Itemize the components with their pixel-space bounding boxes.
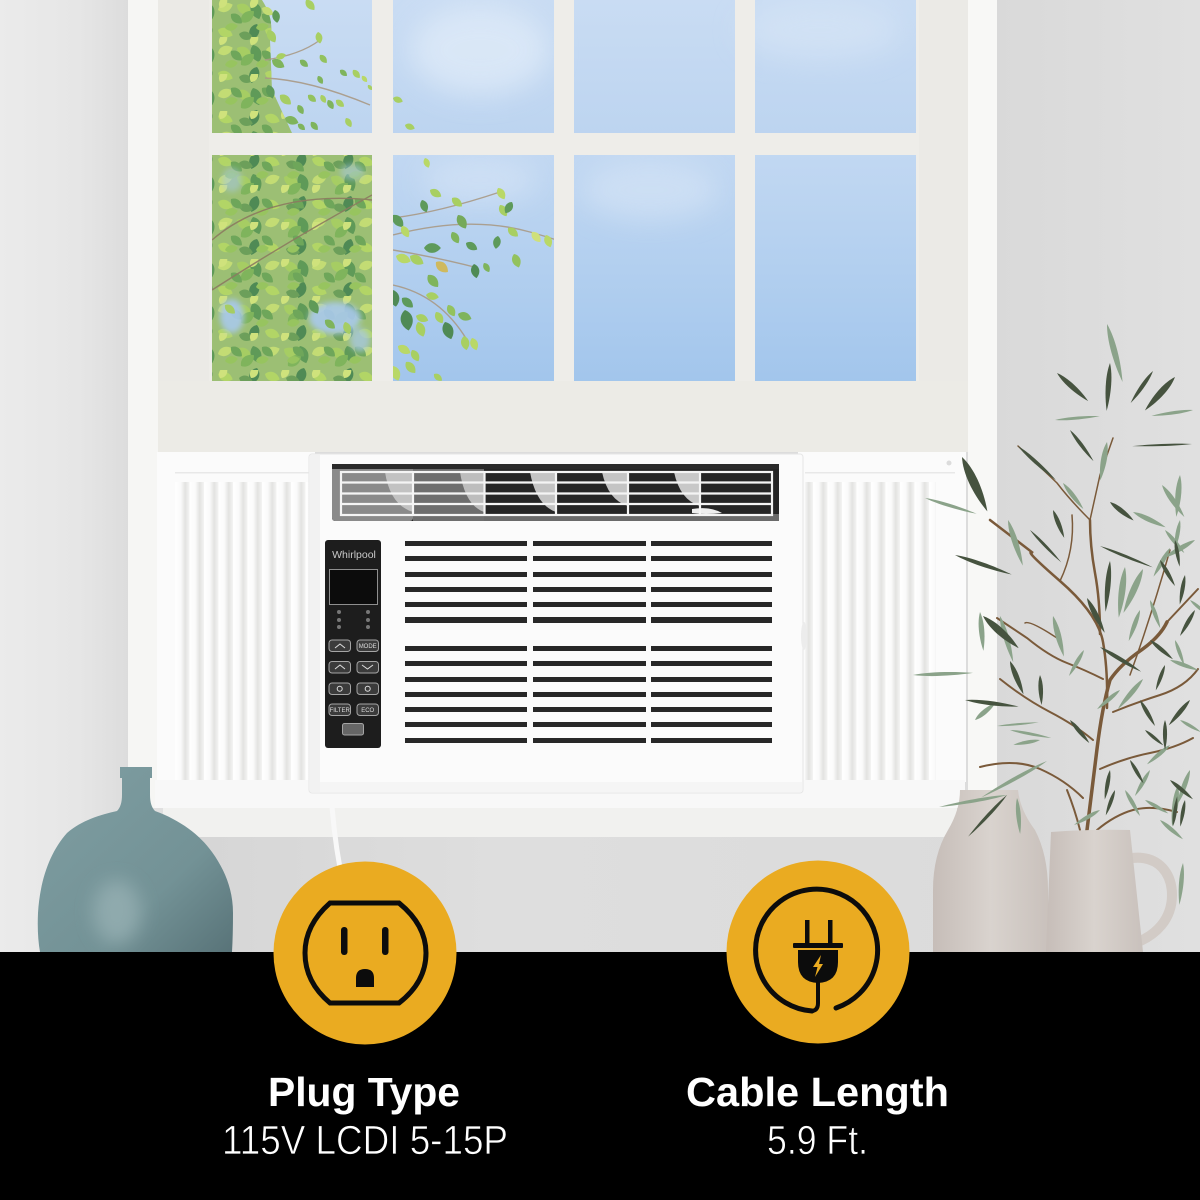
vase: teal round [38,767,233,952]
dark leaves [954,363,1197,838]
display screen [330,570,378,604]
unit body [309,454,807,793]
power cord [331,790,340,868]
brand name: Whirlpool [332,549,376,561]
window sill [155,780,965,837]
value: plug type: 115V LCDI 5-15P [222,1117,508,1163]
accordion side panel left [157,452,315,782]
accordion side panel right [798,452,966,782]
label: cable length: Cable Length [686,1069,949,1115]
front grille slats [405,541,772,743]
window panes with sky and tree [205,0,925,390]
control buttons [329,640,378,735]
sage leaves [913,323,1200,905]
air conditioner [309,454,807,793]
tree foliage [205,0,372,385]
plant leaves [913,323,1200,905]
icon: outlet [274,862,456,1044]
button labels [330,644,377,714]
feature: plug type [222,862,508,1163]
button labels: ECO [361,708,375,714]
wall background [0,0,1200,960]
tree leaves [275,0,554,383]
value: cable length: 5.9 Ft. [767,1117,868,1163]
top air vent [332,464,779,521]
vase: large beige [933,790,1048,952]
icon: plug with coiled cord [726,860,910,1044]
indicator icons [337,610,370,629]
pitcher: beige with handle [1046,830,1172,952]
plant branches [980,438,1198,830]
black footer band [0,952,1200,1200]
button labels: FILTER [330,708,350,714]
button labels: MODE [359,644,377,650]
tree branches [212,40,568,340]
control panel [325,540,381,748]
button glyphs [335,644,373,691]
label: plug type: Plug Type [268,1069,460,1115]
feature: cable length [686,860,949,1163]
window frame [128,0,997,837]
sky [262,0,916,381]
